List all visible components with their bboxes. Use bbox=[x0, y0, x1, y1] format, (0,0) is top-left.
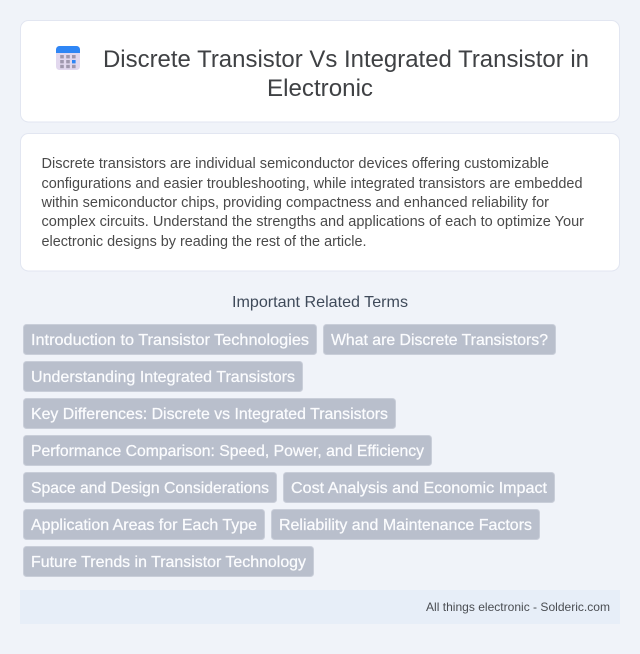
chip: future trends: Future Trends in Transistor Technology bbox=[31, 554, 306, 571]
footer: All things electronic - Solderic.com bbox=[426, 600, 610, 614]
title text: Electronic bbox=[267, 75, 373, 102]
title text bbox=[103, 46, 589, 102]
chip: space and design: Space and Design Considerations bbox=[31, 480, 269, 497]
chip: key differences bbox=[24, 398, 396, 428]
chip: understanding integrated: Understanding Integrated Transistors bbox=[31, 369, 295, 386]
icon: calendar grid bbox=[56, 46, 80, 70]
chip: cost analysis bbox=[284, 472, 554, 502]
title text: Discrete Transistor Vs Integrated Transistor in bbox=[103, 46, 589, 73]
panel: description bbox=[20, 134, 620, 271]
footer bbox=[20, 590, 620, 624]
panel: related term chips bbox=[24, 324, 556, 576]
panel: title header bbox=[20, 20, 620, 122]
chip: key differences: Key Differences: Discrete vs Integrated Transistors bbox=[31, 406, 388, 423]
chip: application areas bbox=[24, 510, 264, 540]
description text: complex circuits. Understand the strengths and applications of each to optimize Your bbox=[42, 214, 584, 230]
description text bbox=[40, 156, 584, 250]
chip: what are discrete bbox=[324, 324, 556, 354]
description text: within semiconductor chips, providing compactness and enhanced reliability for bbox=[40, 195, 549, 211]
chip: performance comparison: Performance Comparison: Speed, Power, and Efficiency bbox=[31, 443, 424, 460]
chip: future trends bbox=[24, 546, 314, 576]
chip: introduction bbox=[24, 324, 316, 354]
chip: reliability: Reliability and Maintenance Factors bbox=[279, 517, 532, 534]
chip: what are discrete: What are Discrete Transistors? bbox=[331, 332, 548, 349]
chip: reliability bbox=[272, 510, 540, 540]
description text: configurations and easier troubleshooting, while integrated transistors are embedded bbox=[42, 176, 582, 192]
heading: important related terms: Important Related Terms bbox=[232, 294, 408, 311]
chip: understanding integrated bbox=[24, 362, 302, 392]
chip: introduction: Introduction to Transistor Technologies bbox=[31, 332, 309, 349]
chip: space and design bbox=[24, 472, 276, 502]
chip: performance comparison bbox=[24, 436, 432, 466]
description text: Discrete transistors are individual semiconductor devices offering customizable bbox=[42, 156, 549, 172]
chip: application areas: Application Areas for Each Type bbox=[31, 517, 257, 534]
description text: electronic designs by reading the rest of the article. bbox=[42, 234, 366, 250]
chip: cost analysis: Cost Analysis and Economic Impact bbox=[291, 480, 548, 497]
